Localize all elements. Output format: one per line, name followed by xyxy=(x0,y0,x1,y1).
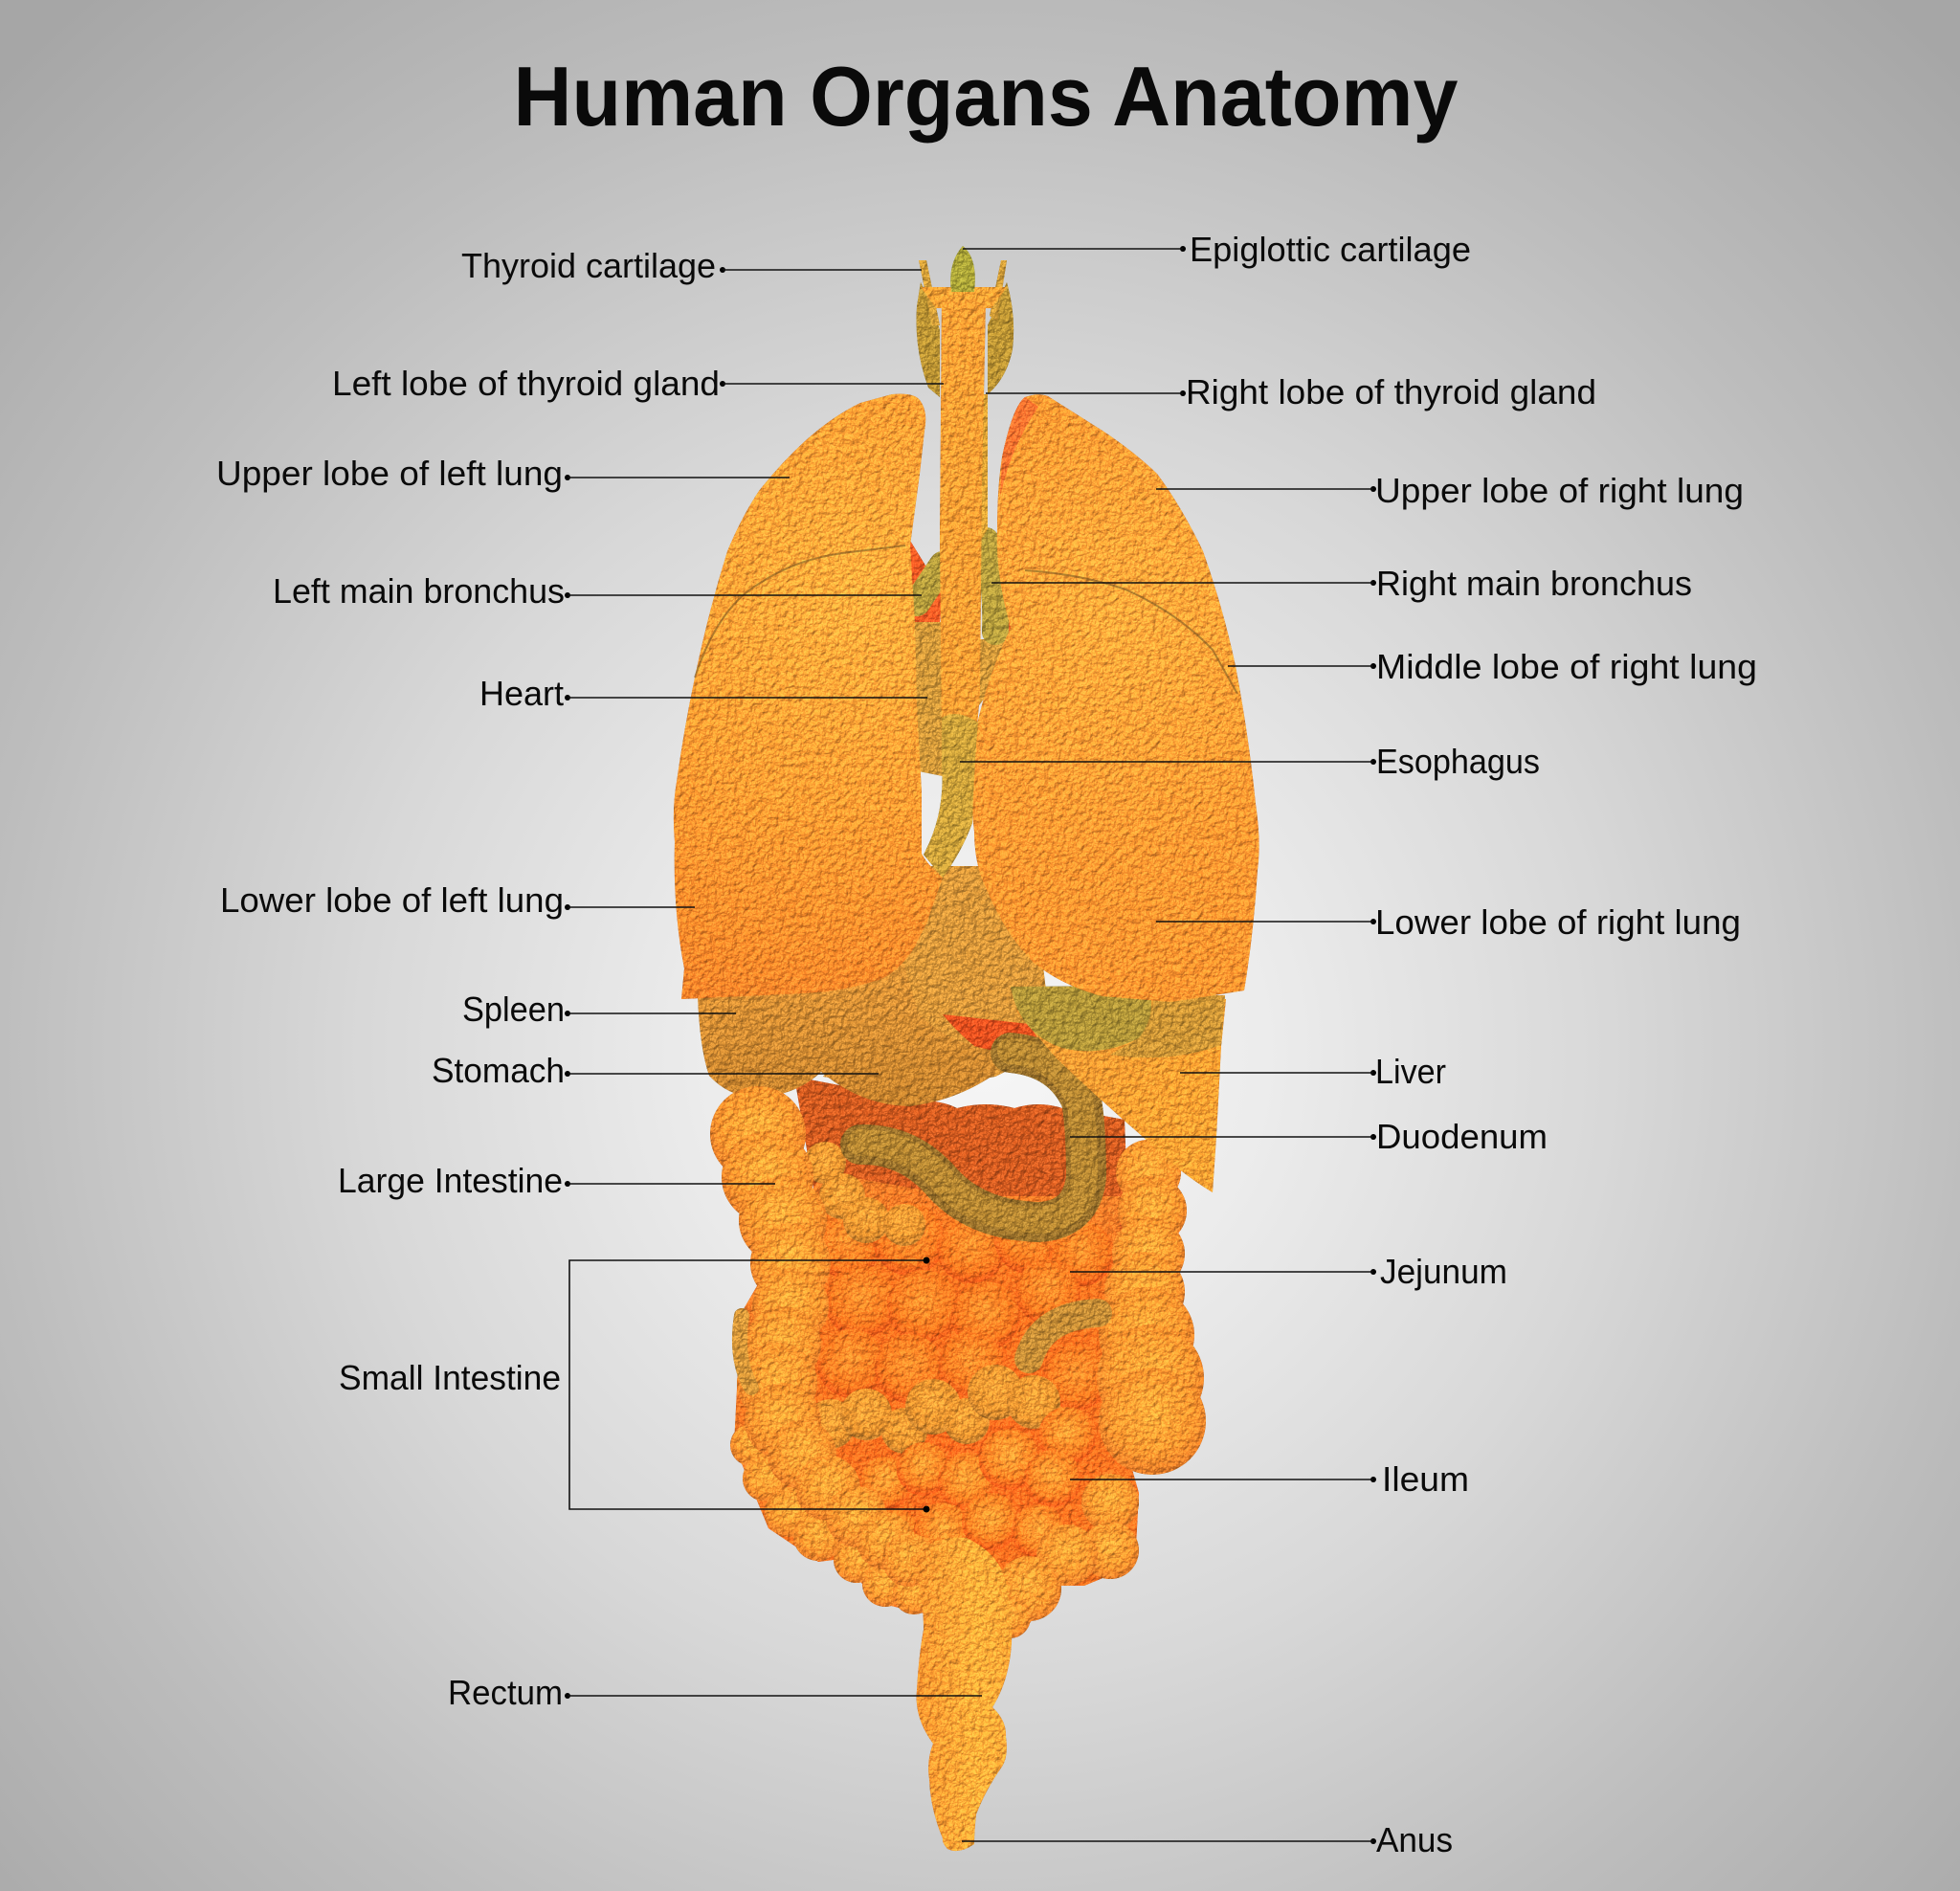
transverse colon xyxy=(794,1077,1129,1244)
label: Rectum: Rectum xyxy=(448,1673,563,1712)
label: Lower lobe of right lung: Lower lobe of right lung xyxy=(1375,902,1741,942)
label: Right main bronchus xyxy=(991,564,1692,603)
small brown loop xyxy=(1029,1313,1098,1359)
right lung xyxy=(971,394,1259,1002)
label: Stomach: Stomach xyxy=(432,1051,565,1090)
lower left intestine coil xyxy=(730,1424,935,1614)
label: Upper lobe of left lung xyxy=(216,454,790,493)
red edge on right lung xyxy=(1000,397,1038,498)
label: Liver xyxy=(1180,1052,1446,1091)
label: Small Intestine with bracket: Small Intestine xyxy=(339,1358,561,1397)
label: Right lobe of thyroid gland: Right lobe of thyroid gland xyxy=(1186,372,1596,412)
label: Duodenum xyxy=(1070,1117,1548,1156)
epiglottis xyxy=(950,246,975,292)
label: Rectum xyxy=(448,1673,982,1712)
upper jejunum loop behind colon xyxy=(804,1142,925,1246)
small intestine: jejunum and ileum mass xyxy=(730,1142,1139,1638)
esophagus lower section xyxy=(924,714,978,878)
label: Anus xyxy=(962,1820,1453,1859)
left outer haustra xyxy=(740,1316,751,1388)
trachea xyxy=(940,299,986,737)
label: Lower lobe of right lung xyxy=(1156,902,1741,942)
label: Epiglottic cartilage xyxy=(963,230,1471,269)
thyroid lobes xyxy=(917,282,1013,397)
label: Duodenum: Duodenum xyxy=(1376,1117,1548,1156)
rectum xyxy=(910,1537,1012,1851)
ascending colon left xyxy=(710,1086,936,1587)
heart xyxy=(912,622,1007,776)
anatomical organs illustration xyxy=(674,246,1259,1851)
ileum loops xyxy=(806,1365,1060,1454)
label: Upper lobe of right lung: Upper lobe of right lung xyxy=(1375,471,1744,510)
label: Esophagus xyxy=(960,742,1540,781)
red tissue under mid organs xyxy=(943,1014,1043,1062)
label: Left main bronchus: Left main bronchus xyxy=(273,571,565,611)
liver xyxy=(1015,995,1226,1192)
duodenum xyxy=(860,1051,1086,1222)
descending colon right xyxy=(1097,1140,1206,1475)
label: Middle lobe of right lung: Middle lobe of right lung xyxy=(1376,647,1757,686)
label: Large Intestine: Large Intestine xyxy=(338,1161,563,1200)
thyroid horns xyxy=(919,260,1007,325)
red tissue behind bronchi xyxy=(907,536,1013,670)
label: Spleen: Spleen xyxy=(462,990,565,1029)
stomach and spleen xyxy=(698,957,995,1106)
label: Thyroid cartilage: Thyroid cartilage xyxy=(461,246,716,285)
label: Left main bronchus xyxy=(273,571,922,611)
thyroid cartilage plate xyxy=(921,287,1007,308)
mid-abdominal organs under the lungs xyxy=(823,866,1053,1091)
label: Spleen xyxy=(462,990,736,1029)
label: Right lobe of thyroid gland xyxy=(986,372,1596,412)
label: Anus: Anus xyxy=(1376,1820,1453,1859)
label: Jejunum: Jejunum xyxy=(1380,1252,1507,1291)
label: Jejunum xyxy=(1070,1252,1507,1291)
label: Left lobe of thyroid gland: Left lobe of thyroid gland xyxy=(332,364,720,403)
label: Stomach xyxy=(432,1051,879,1090)
label: Liver: Liver xyxy=(1375,1052,1446,1091)
label: Ileum: Ileum xyxy=(1382,1459,1469,1499)
label: Lower lobe of left lung: Lower lobe of left lung xyxy=(220,880,564,920)
label: Thyroid cartilage xyxy=(461,246,922,285)
label: Upper lobe of right lung xyxy=(1156,471,1744,510)
bronchi xyxy=(917,541,995,632)
right trachea strip xyxy=(978,394,988,545)
label: Upper lobe of left lung: Upper lobe of left lung xyxy=(216,454,563,493)
pancreas and mediastinal organs xyxy=(904,866,1035,1016)
label: Small Intestine with bracket xyxy=(339,1257,930,1512)
label: Esophagus: Esophagus xyxy=(1376,742,1540,781)
lung fissures xyxy=(695,545,1237,694)
label: Epiglottic cartilage: Epiglottic cartilage xyxy=(1190,230,1471,269)
label: Heart xyxy=(479,674,927,713)
label: Large Intestine xyxy=(338,1161,775,1200)
title: Human Organs Anatomy xyxy=(513,49,1459,144)
jejunum loops xyxy=(813,1203,1114,1411)
label: Ileum xyxy=(1070,1459,1469,1499)
label: Right main bronchus: Right main bronchus xyxy=(1376,564,1692,603)
label: Middle lobe of right lung xyxy=(1228,647,1757,686)
label: Heart: Heart xyxy=(479,674,564,713)
gallbladder xyxy=(1011,986,1151,1051)
label: Left lobe of thyroid gland xyxy=(332,364,944,403)
tan liver strip xyxy=(1110,995,1225,1057)
left lung xyxy=(674,394,943,999)
